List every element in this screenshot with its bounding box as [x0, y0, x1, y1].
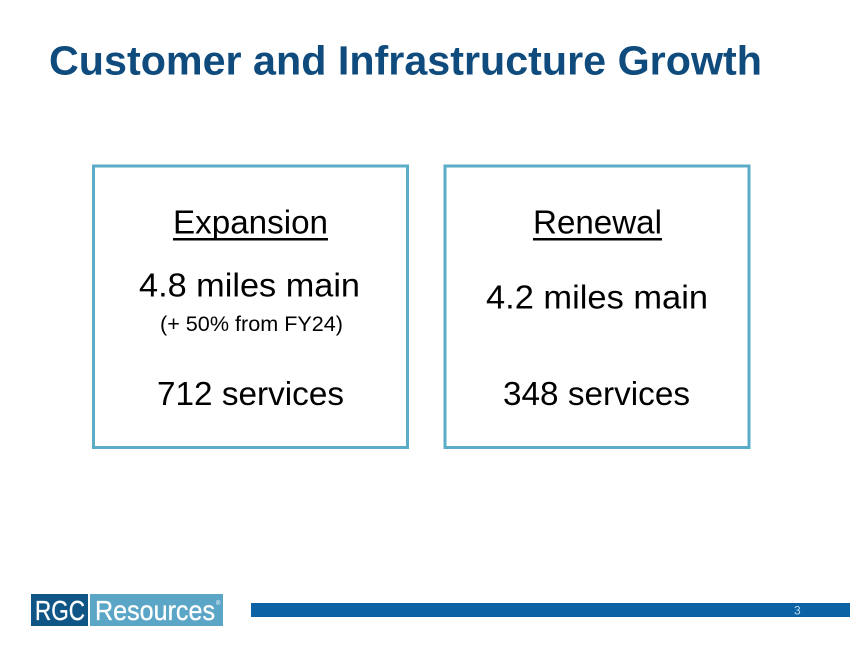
panel: renewal [445, 166, 749, 448]
logo: RGC Resources: RGC [35, 595, 85, 626]
title: Customer and Infrastructure Growth [49, 38, 762, 84]
renewal main miles: 4.2 miles main [486, 280, 708, 316]
logo: RGC Resources [31, 594, 223, 626]
heading: expansion: Expansion [173, 204, 328, 240]
expansion main miles: 4.8 miles main [139, 268, 360, 304]
page number: 3 [794, 604, 801, 618]
expansion growth note: (+ 50% from FY24) [160, 313, 343, 336]
renewal services: 348 services [503, 376, 690, 413]
logo: RGC Resources: ® [216, 600, 221, 607]
logo: RGC Resources: Resources [95, 595, 215, 626]
heading: renewal: Renewal [533, 204, 662, 240]
panel: expansion [94, 166, 408, 448]
expansion services: 712 services [157, 376, 344, 413]
footer bar [251, 603, 850, 617]
